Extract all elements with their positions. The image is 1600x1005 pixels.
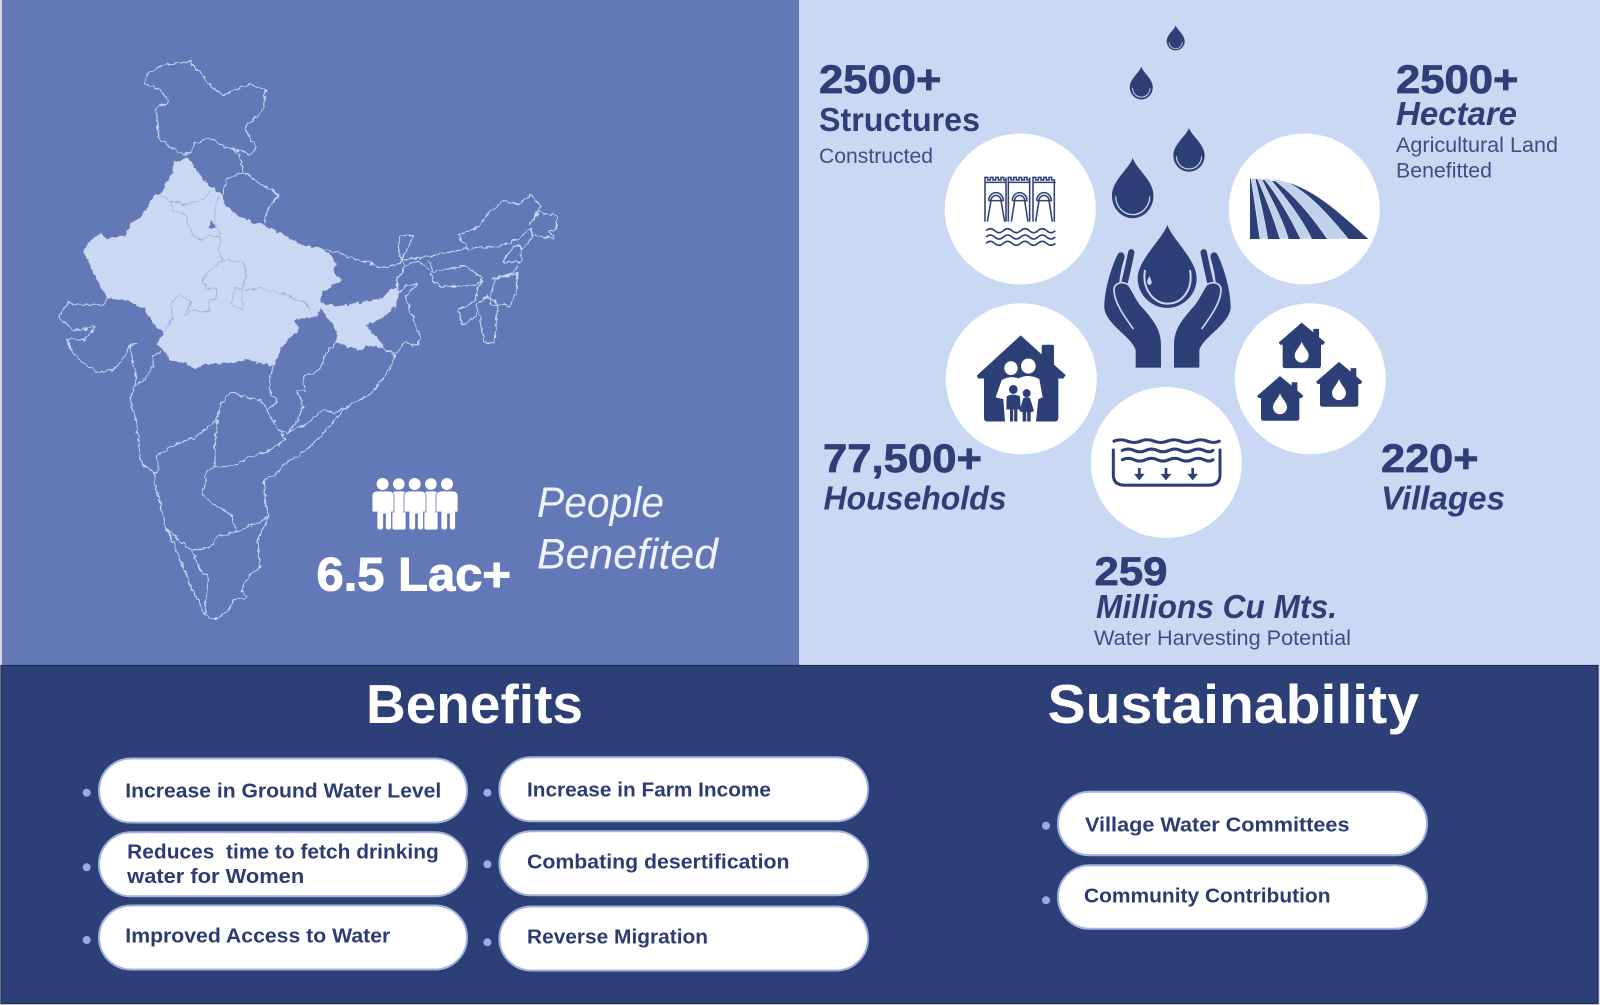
benefit: desertification bbox=[483, 831, 868, 895]
big drop bbox=[1138, 225, 1197, 308]
stat: structures: Structures bbox=[819, 101, 980, 138]
people benefited count: 6.5 Lac+ bbox=[316, 548, 511, 600]
icon: farm field bbox=[1250, 178, 1368, 239]
stat: water harvesting potential: Millions Cu Mts. bbox=[1096, 588, 1337, 625]
sustainability: village water committees bbox=[1042, 792, 1427, 855]
icon: hands holding drop bbox=[1104, 225, 1231, 368]
circle: households bbox=[946, 303, 1097, 454]
heading: sustainability: Sustainability bbox=[1048, 673, 1419, 735]
icon: people group bbox=[372, 478, 458, 530]
icon: water tank bbox=[1113, 440, 1220, 485]
stat: water harvesting potential bbox=[1094, 550, 1351, 650]
drop 3 bbox=[1173, 128, 1205, 172]
benefit: reverse migration bbox=[483, 906, 868, 970]
stat: hectare: Benefitted bbox=[1396, 160, 1492, 182]
panel: benefits and sustainability bbox=[1, 666, 1598, 1004]
drop 1 bbox=[1167, 26, 1185, 51]
stat: structures bbox=[819, 58, 980, 168]
circle: water harvesting bbox=[1091, 387, 1242, 538]
benefit: desertification: Combating desertification bbox=[527, 852, 790, 874]
panel: statistics background bbox=[799, 0, 1600, 666]
map of India bbox=[59, 62, 557, 620]
highlighted states bbox=[83, 158, 399, 369]
stat: households bbox=[823, 437, 1006, 516]
icon: family in house bbox=[977, 335, 1066, 421]
stat: hectare: Agricultural Land bbox=[1396, 134, 1558, 157]
stat: water harvesting potential: Water Harvesting Potential bbox=[1094, 627, 1351, 650]
benefit: access to water: Improved Access to Water bbox=[125, 926, 391, 948]
stat: structures: Constructed bbox=[819, 145, 933, 168]
sustainability: community contribution bbox=[1042, 865, 1427, 929]
left hand bbox=[1104, 252, 1161, 368]
drop 2 bbox=[1130, 67, 1153, 99]
sustainability: village water committees: Village Water Committees bbox=[1085, 815, 1350, 837]
heading: benefits: Benefits bbox=[366, 673, 583, 735]
people benefited label: People bbox=[537, 479, 664, 527]
benefit: reverse migration: Reverse Migration bbox=[527, 926, 708, 948]
stat: households: 77,500+ bbox=[823, 437, 982, 481]
drop 4 bbox=[1112, 158, 1154, 218]
sustainability: community contribution: Community Contribution bbox=[1084, 886, 1330, 908]
benefit: ground water: Increase in Ground Water Level bbox=[125, 780, 441, 802]
benefit: farm income bbox=[483, 757, 868, 821]
benefit: access to water bbox=[83, 906, 467, 970]
stat: villages bbox=[1381, 437, 1505, 516]
panel: map background bbox=[2, 0, 799, 666]
circle: villages bbox=[1235, 303, 1386, 454]
stat: hectare: 2500+ bbox=[1396, 58, 1518, 102]
circle: hectare bbox=[1229, 134, 1380, 284]
people benefited label: Benefited bbox=[537, 530, 720, 578]
benefit: time to fetch water: water for Women bbox=[126, 866, 304, 888]
benefit: time to fetch water bbox=[83, 832, 467, 896]
stat: villages: 220+ bbox=[1381, 437, 1478, 481]
icon: houses with drops bbox=[1257, 323, 1362, 421]
right hand bbox=[1174, 252, 1231, 368]
stat: hectare: Hectare bbox=[1396, 95, 1517, 132]
benefit: farm income: Increase in Farm Income bbox=[527, 780, 771, 802]
stat: households: Households bbox=[824, 480, 1006, 516]
circle: structures bbox=[945, 134, 1096, 284]
benefit: time to fetch water: Reduces time to fetch drinking bbox=[127, 841, 439, 863]
water drops falling bbox=[1112, 26, 1205, 218]
benefit: ground water bbox=[83, 758, 467, 822]
stat: water harvesting potential: 259 bbox=[1094, 550, 1168, 594]
people benefited label bbox=[537, 479, 720, 578]
stat: structures: 2500+ bbox=[819, 58, 942, 102]
stat: hectare bbox=[1396, 58, 1558, 182]
stat: villages: Villages bbox=[1381, 480, 1505, 516]
icon: dam bbox=[985, 177, 1056, 245]
